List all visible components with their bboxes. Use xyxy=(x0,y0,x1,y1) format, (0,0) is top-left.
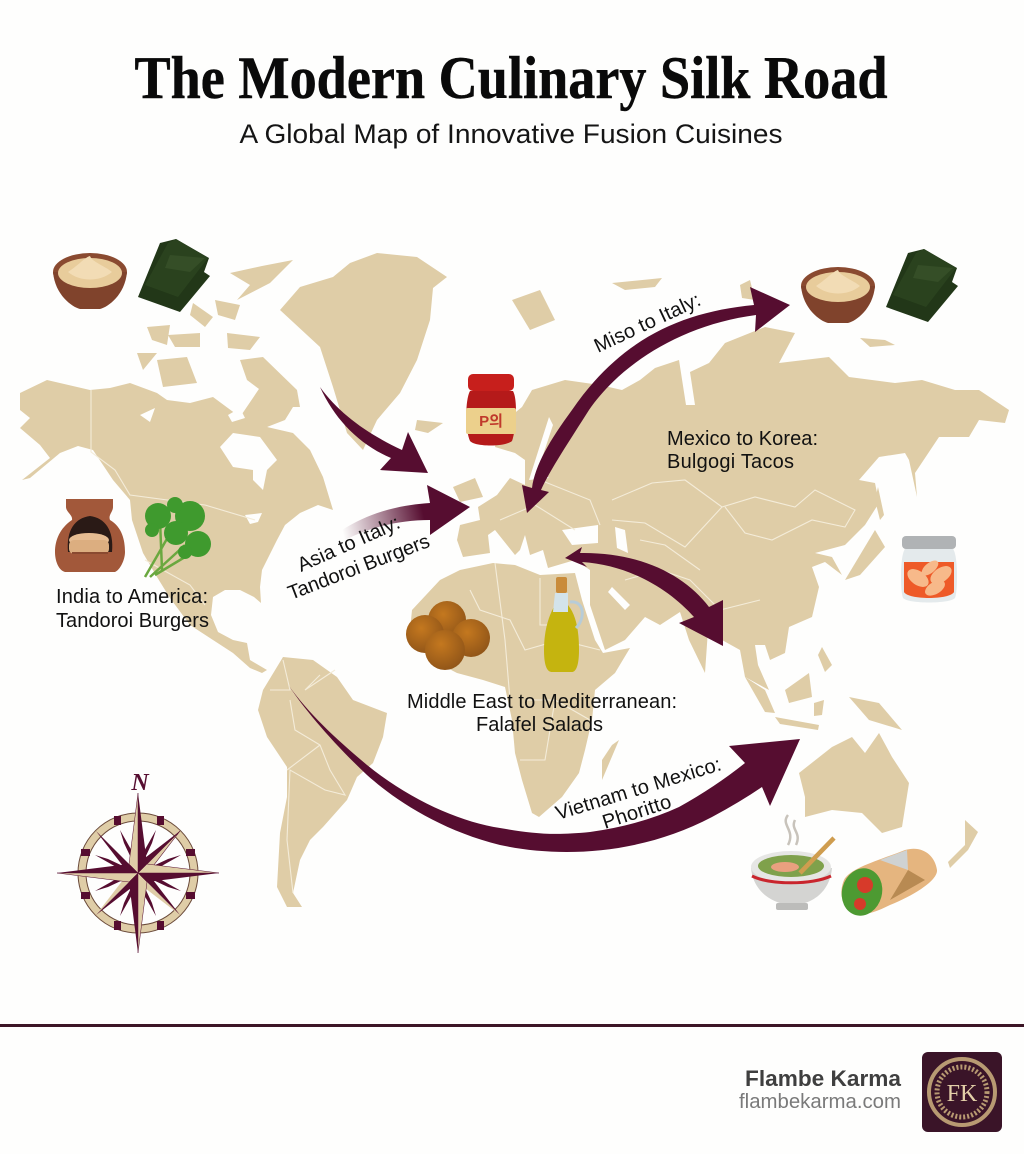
icon: pho bowl xyxy=(751,815,834,910)
footer brand name: Flambe Karma xyxy=(745,1066,902,1091)
map: africa xyxy=(410,563,630,817)
label: phoritto: Phoritto xyxy=(600,791,674,834)
map: south america xyxy=(258,657,387,907)
label: mexico to korea: Mexico to Korea: xyxy=(667,428,818,450)
footer url: flambekarma.com xyxy=(739,1091,901,1113)
label: vietnam to mexico: Vietnam to Mexico: xyxy=(553,753,724,825)
label: miso to italy: Miso to Italy: xyxy=(591,289,704,358)
icon: kimchi jar xyxy=(901,536,957,602)
label: asia to italy: Asia to Italy: xyxy=(294,512,404,577)
arrow: greenland to europe xyxy=(320,387,428,473)
world map xyxy=(20,253,1009,907)
label: middle east to mediterranean: Falafel Salads xyxy=(476,714,603,736)
arrow: middle east to india xyxy=(565,547,723,646)
icon: gochujang jar: P의 xyxy=(479,413,503,430)
map: greenland xyxy=(280,253,447,450)
label: tandoroi burgers: Tandoroi Burgers xyxy=(285,530,433,605)
map: inland seas xyxy=(140,408,630,610)
label: mexico to korea: Bulgogi Tacos xyxy=(667,451,794,473)
map: oceania and islands xyxy=(415,278,978,868)
icon: miso bowl right xyxy=(801,267,875,323)
icon: olive oil bottle xyxy=(544,577,582,672)
label: india to america: India to America: xyxy=(56,586,208,608)
footer divider xyxy=(0,1024,1024,1027)
icon: miso bowl left xyxy=(53,253,127,309)
icon: falafel xyxy=(406,601,490,670)
label: india to america: Tandoroi Burgers xyxy=(56,610,209,632)
icon: burrito xyxy=(836,849,937,920)
map: eurasia xyxy=(457,327,1009,690)
icon: cilantro xyxy=(145,497,211,577)
map: arctic islands xyxy=(137,260,300,435)
map: country borders xyxy=(91,390,855,893)
icon: nori right xyxy=(886,249,958,322)
title: The Modern Culinary Silk Road xyxy=(134,45,888,111)
map: north america xyxy=(20,380,333,673)
icon: nori left xyxy=(138,239,210,312)
footer logo xyxy=(922,1052,1002,1132)
icon: tandoor oven xyxy=(55,499,125,572)
compass rose xyxy=(57,770,219,953)
label: middle east to mediterranean: Middle East to Mediterranean: xyxy=(407,691,677,713)
compass rose: N xyxy=(130,770,150,796)
subtitle: A Global Map of Innovative Fusion Cuisines xyxy=(240,119,782,149)
footer logo: FK xyxy=(947,1081,978,1107)
icon: gochujang jar xyxy=(466,374,516,446)
arrow: miso to italy xyxy=(522,287,790,513)
arrow: vietnam to mexico xyxy=(289,686,800,852)
arrow: asia to italy xyxy=(342,485,470,540)
